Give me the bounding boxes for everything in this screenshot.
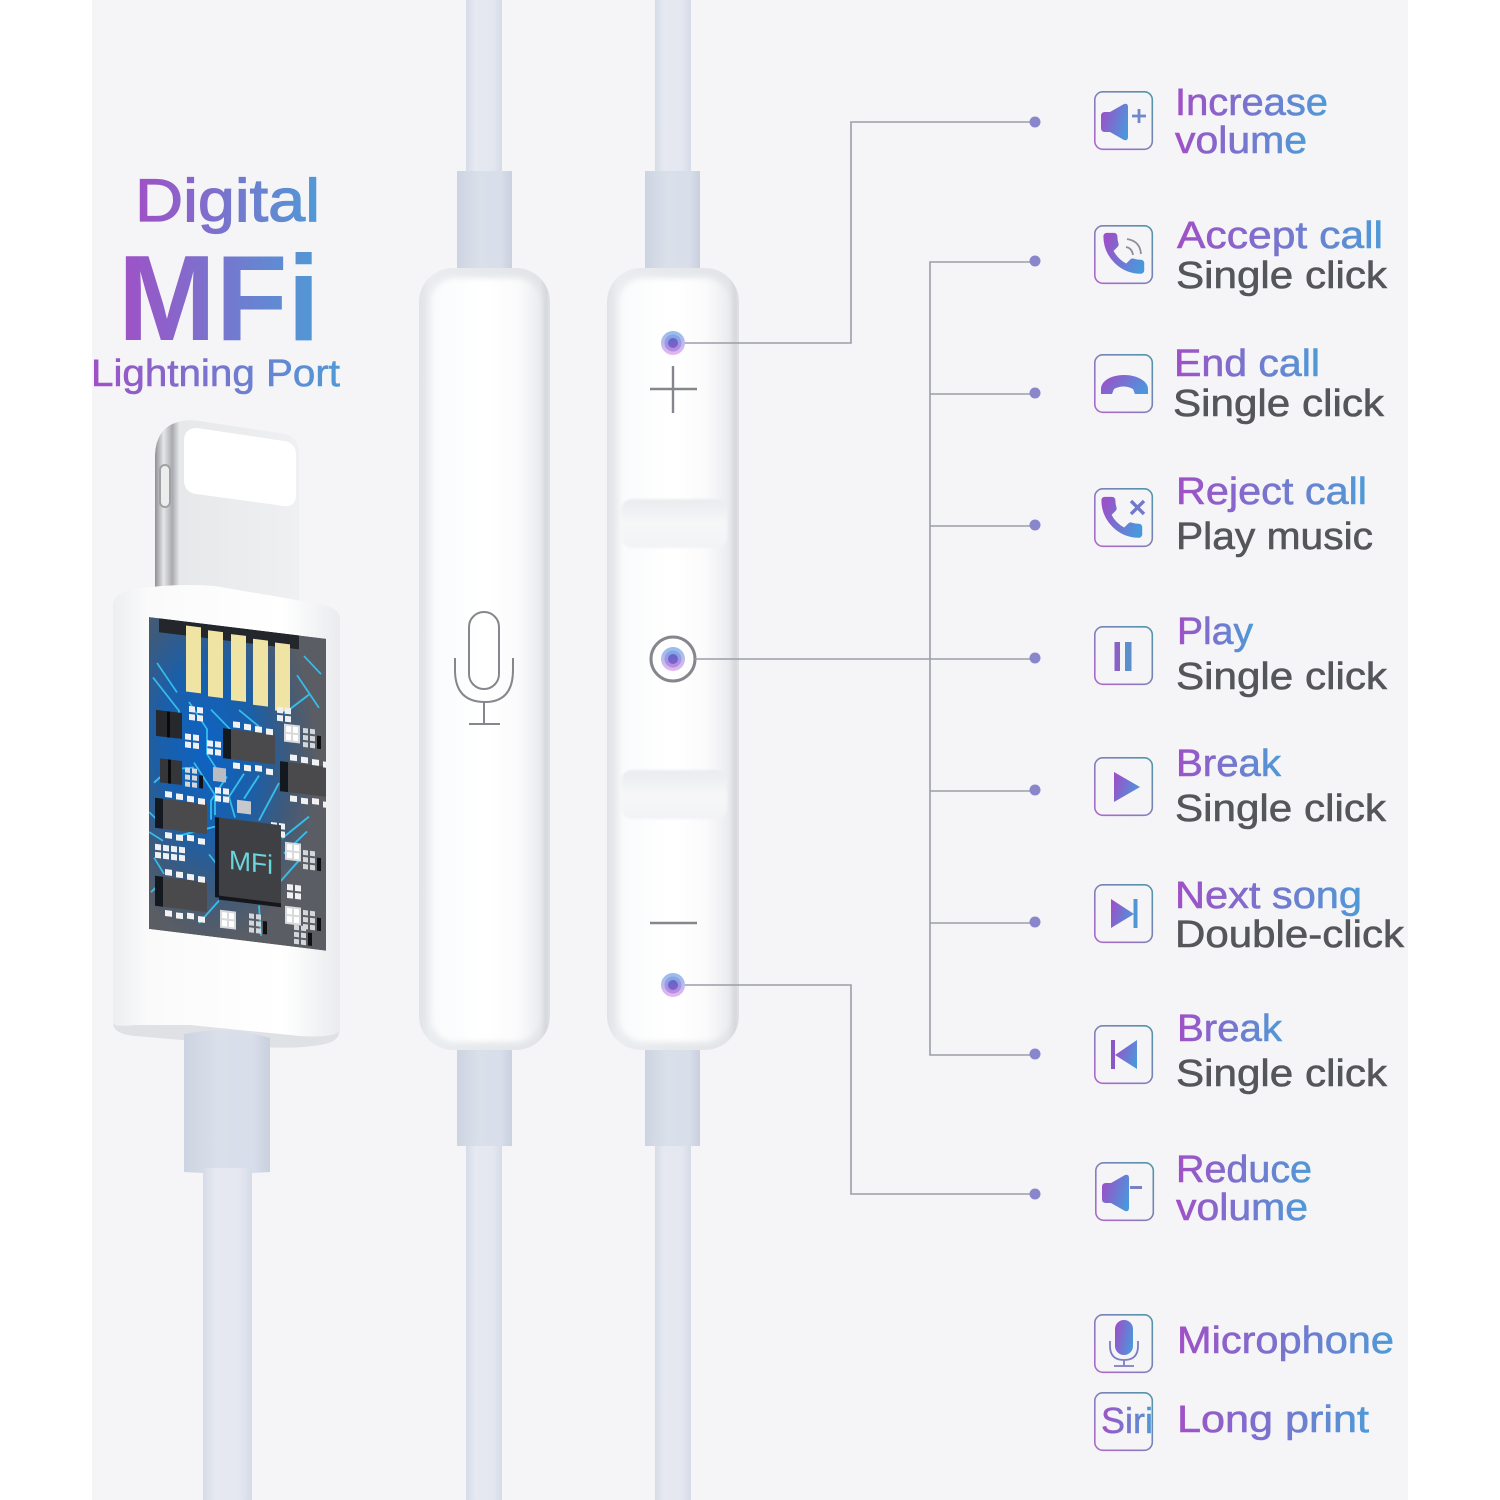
- label: Reduce volume: volume: [1176, 1187, 1308, 1229]
- label: Play, Single click: Single click: [1176, 656, 1388, 698]
- label: Microphone: Microphone: [1177, 1320, 1394, 1362]
- button hot-spot dots: [661, 331, 685, 997]
- inline housing body: [419, 268, 550, 1050]
- plug contact window: [184, 428, 296, 506]
- icon: reduce volume: [1096, 1163, 1153, 1220]
- MFi chip: [215, 817, 281, 907]
- label: Next song, Double-click: [1175, 875, 1405, 956]
- metal plug tip: [155, 420, 299, 605]
- label: Reject call, Play music: Play music: [1176, 516, 1373, 558]
- label: Accept call, Single click: Single click: [1176, 255, 1388, 297]
- housing highlight: [619, 278, 730, 1042]
- label: Next song, Double-click: Next song: [1175, 875, 1362, 917]
- lower collar: [645, 1046, 700, 1146]
- icon: microphone: [1095, 1315, 1152, 1372]
- icon: accept call: [1095, 226, 1152, 283]
- heading line: MFi: MFi: [118, 230, 320, 366]
- icon: Siri: Siri: [1101, 1400, 1153, 1441]
- label: Accept call, Single click: Accept call: [1177, 215, 1383, 257]
- strain relief collar: [184, 1030, 270, 1174]
- label: Break, Single click: [1176, 1008, 1388, 1095]
- icon: next track: [1095, 885, 1152, 942]
- left cable with microphone housing: [419, 0, 550, 1500]
- upper collar: [645, 171, 700, 271]
- label: Break, Single click: Single click: [1176, 1053, 1388, 1095]
- label: Increase volume: Increase: [1175, 82, 1328, 124]
- label: Play, Single click: [1176, 611, 1388, 698]
- lower cable: [466, 1146, 502, 1500]
- leader end dots: [1030, 116, 1040, 1200]
- label: End call, Single click: [1173, 343, 1385, 425]
- board base: [149, 617, 326, 951]
- dark strip behind contacts: [159, 618, 299, 649]
- upper cable: [466, 0, 502, 176]
- label: Break, Single click: Break: [1176, 743, 1282, 785]
- heading: Digital MFi Lightning Port: [91, 167, 340, 395]
- button groove lower: [621, 770, 727, 819]
- label: Reject call, Play music: Reject call: [1176, 471, 1367, 513]
- label: End call, Single click: End call: [1174, 343, 1320, 385]
- icon: Siri: [1095, 1393, 1153, 1450]
- label: Accept call, Single click: [1176, 215, 1388, 297]
- label: Break, Single click: Break: [1177, 1008, 1283, 1050]
- lightning connector: [113, 420, 340, 1500]
- upper collar: [457, 171, 512, 271]
- label: Increase volume: volume: [1175, 120, 1307, 162]
- heading line: Digital: Digital: [135, 167, 320, 234]
- label: Break, Single click: [1175, 743, 1387, 830]
- housing highlight: [431, 278, 541, 1042]
- chips: [155, 721, 326, 923]
- label: Reduce volume: [1176, 1149, 1312, 1229]
- lower cable: [203, 1168, 252, 1500]
- plus mark: [650, 366, 697, 413]
- icon: play triangle: [1095, 758, 1152, 815]
- centre button ring: [651, 637, 695, 681]
- button groove upper: [621, 499, 727, 548]
- label: Next song, Double-click: Double-click: [1175, 914, 1405, 956]
- MFi chip: MFi: [229, 844, 273, 880]
- small components: [155, 692, 321, 947]
- label: End call, Single click: Single click: [1173, 383, 1385, 425]
- icon: previous track: [1095, 1026, 1152, 1083]
- circuit board window: [149, 617, 332, 951]
- lower cable: [655, 1146, 691, 1500]
- microphone glyph: [455, 612, 513, 724]
- upper cable: [655, 0, 691, 176]
- label: Reduce volume: Reduce: [1176, 1149, 1312, 1191]
- label: Long print: Long print: [1177, 1399, 1370, 1441]
- label: Increase volume: [1175, 82, 1328, 162]
- housing underside: [113, 1024, 339, 1048]
- label: Reject call, Play music: [1176, 471, 1373, 558]
- gold contacts: [186, 626, 290, 712]
- right cable with button housing: [607, 0, 739, 1500]
- icon: end call: [1095, 355, 1152, 412]
- heading line: Lightning Port: Lightning Port: [91, 353, 340, 395]
- minus mark: [650, 922, 697, 924]
- callout leader lines: [673, 122, 1035, 1194]
- lower collar: [457, 1046, 512, 1146]
- label: Play, Single click: Play: [1177, 611, 1253, 653]
- label: Break, Single click: Single click: [1175, 788, 1387, 830]
- inline housing body: [607, 268, 739, 1050]
- icon: increase volume: [1095, 92, 1152, 149]
- plug side notch: [160, 465, 170, 507]
- icon: pause: [1095, 627, 1152, 684]
- connector housing: [113, 585, 340, 1048]
- icon: reject call: [1095, 489, 1152, 546]
